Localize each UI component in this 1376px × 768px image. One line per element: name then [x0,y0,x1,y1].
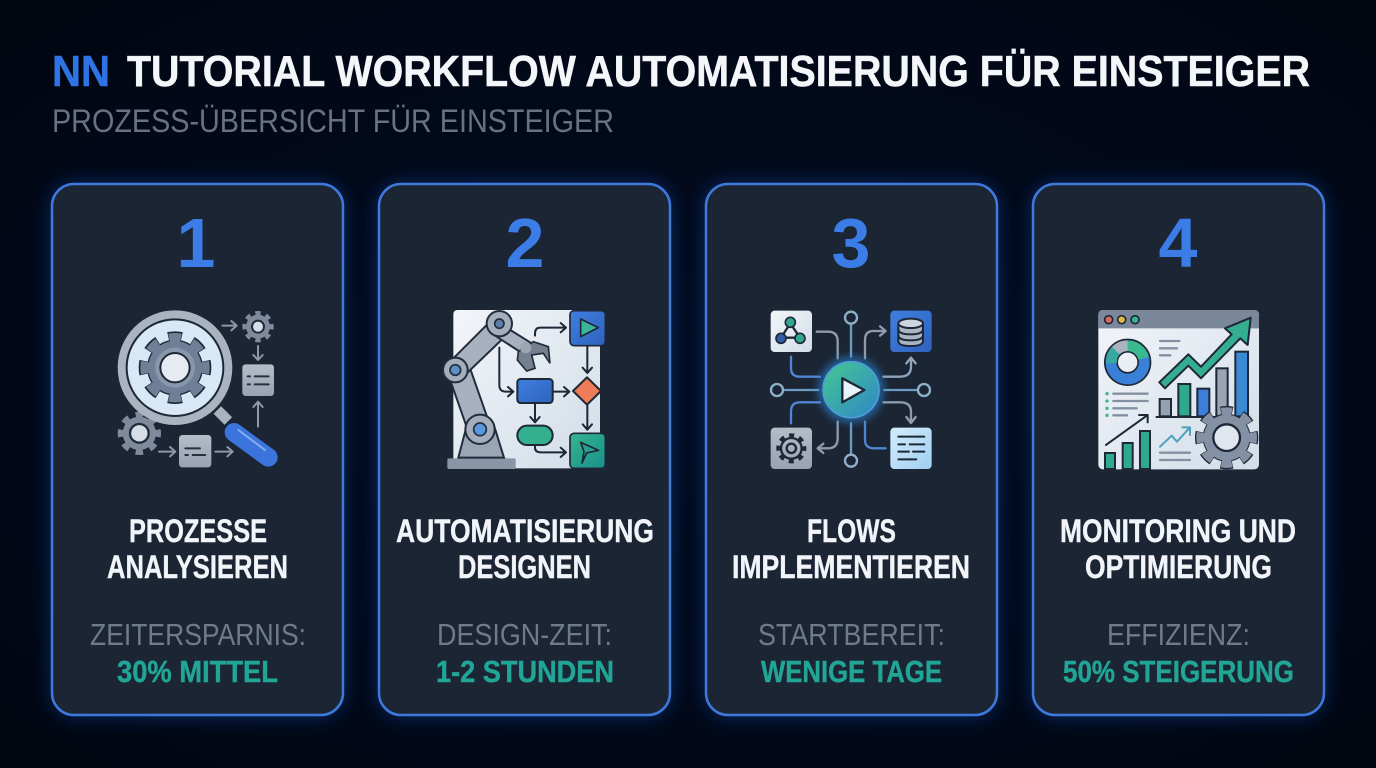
metric 4: EFFIZIENZ: [1107,617,1250,652]
icon: robot arm and flowchart [443,310,605,469]
metric 4 [1063,617,1294,689]
step title 1 [107,513,288,585]
metric 1: ZEITERSPARNIS: [90,617,306,652]
step number 4: 4 [1159,204,1198,282]
icon: magnifier over gears and process boxes [118,310,274,467]
step title 2 [396,513,654,585]
icon: monitoring dashboard [1098,310,1259,469]
metric 4: 50% STEIGERUNG [1063,654,1294,689]
step title 4: MONITORING UND [1060,513,1296,549]
step title 1: ANALYSIEREN [107,549,288,585]
step title 2: DESIGNEN [458,549,591,585]
step title 3: IMPLEMENTIEREN [732,549,970,585]
metric 2: DESIGN-ZEIT: [437,617,612,652]
step title 4: OPTIMIERUNG [1085,549,1272,585]
panel: step 2 [379,184,670,716]
metric 1: 30% MITTEL [117,654,278,689]
step title 4 [1060,513,1296,585]
metric 3 [758,617,945,689]
icon: central play hub with connections [771,311,932,469]
metric 3: STARTBEREIT: [758,617,945,652]
metric 2 [436,617,614,689]
panel: step 3 [706,184,997,716]
panel: step 4 [1033,184,1324,716]
step number 3: 3 [832,204,870,282]
title: NN [52,47,110,96]
step title 1: PROZESSE [129,513,267,549]
step title 2: AUTOMATISIERUNG [396,513,654,549]
metric 2: 1-2 STUNDEN [436,654,614,689]
step number 2: 2 [506,204,544,282]
step title 3: FLOWS [807,513,896,549]
step title 3 [732,513,970,585]
panel: step 1 [52,184,343,716]
metric 3: WENIGE TAGE [761,654,942,689]
subtitle: PROZESS-ÜBERSICHT FÜR EINSTEIGER [52,103,614,139]
metric 1 [90,617,306,689]
step number 1: 1 [177,204,215,282]
